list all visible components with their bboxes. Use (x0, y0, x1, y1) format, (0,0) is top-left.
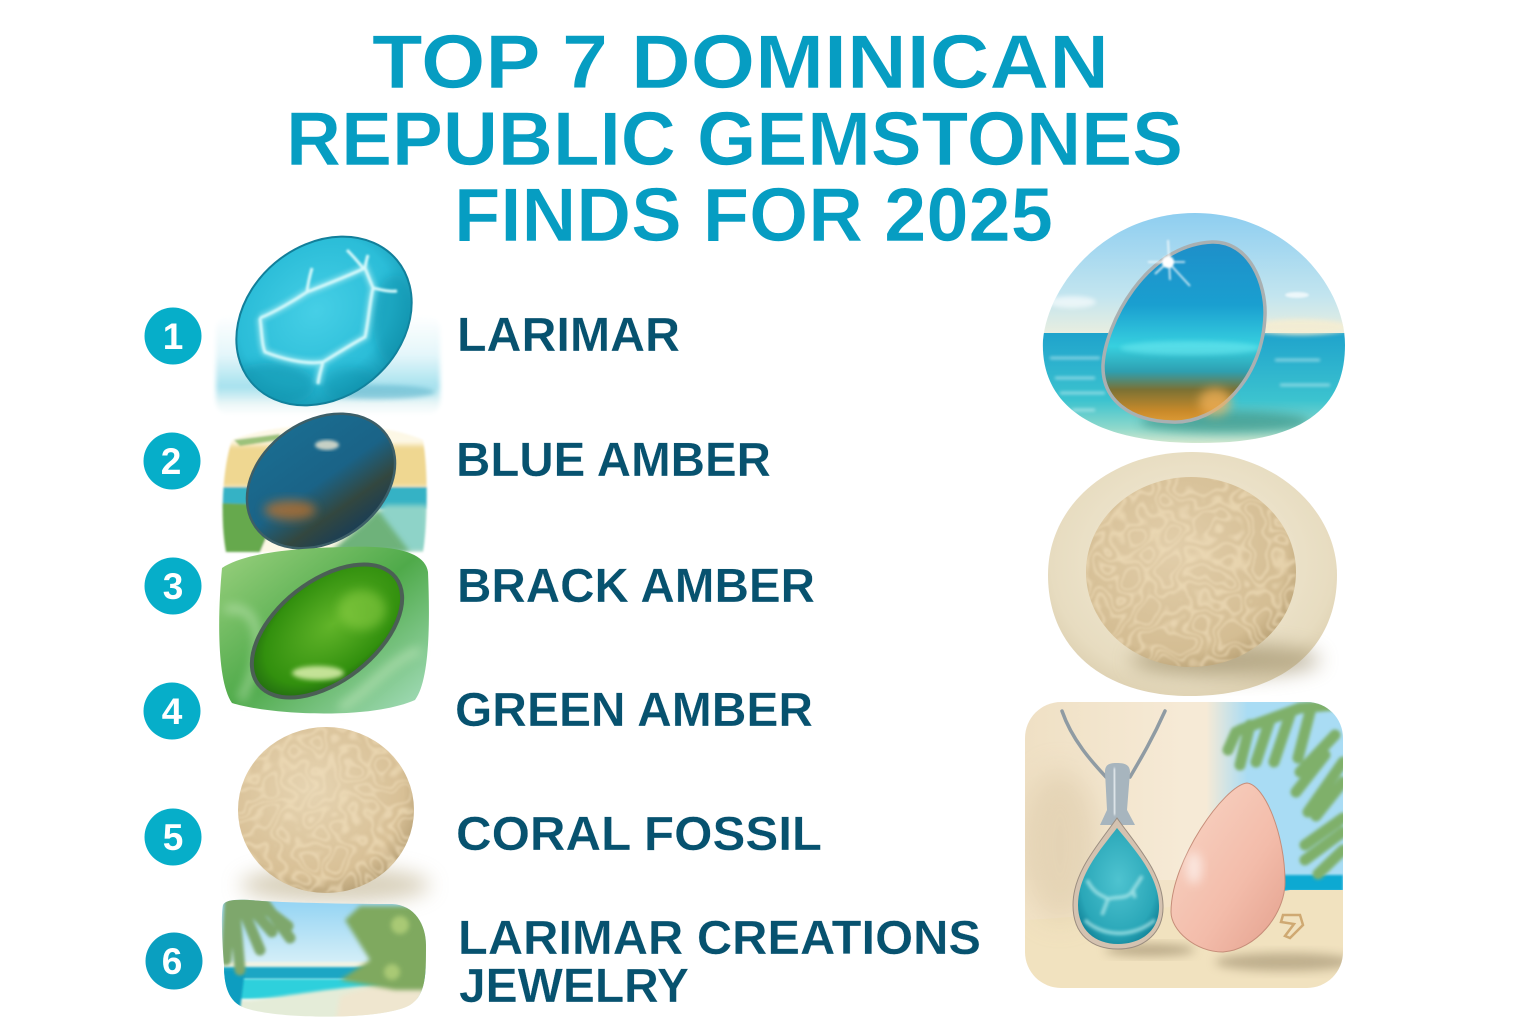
blue amber illustration (221, 412, 428, 554)
illustration: amber egg on the sea (1040, 210, 1350, 445)
title (286, 20, 1183, 258)
label: blue amber: BLUE AMBER (456, 434, 771, 487)
larimar pendant (1062, 711, 1165, 949)
badge 2 (144, 432, 200, 490)
title: FINDS FOR 2025 (454, 173, 1053, 258)
label: larimar creations jewelry: LARIMAR CREATIONS (458, 912, 981, 965)
larimar illustration (213, 236, 443, 410)
illustration: larimar pendant and pink stone (1022, 702, 1355, 988)
label: brack amber: BRACK AMBER (457, 560, 815, 613)
badge 4 (144, 682, 200, 740)
label: coral fossil: CORAL FOSSIL (456, 808, 822, 861)
badge 5: 5 (163, 817, 183, 858)
badge 4: 4 (162, 691, 183, 732)
gem labels (455, 309, 981, 1013)
green amber illustration (219, 538, 429, 724)
label: larimar creations jewelry (458, 912, 981, 1013)
title: REPUBLIC GEMSTONES (286, 97, 1183, 182)
badge 3: 3 (163, 566, 183, 607)
list column: gem illustrations (213, 236, 443, 1017)
badge 1: 1 (163, 316, 183, 357)
coral fossil illustration (238, 727, 430, 903)
beach illustration (222, 900, 426, 1017)
pink stone (1171, 783, 1303, 952)
badge 5 (144, 808, 202, 866)
badge 6 (146, 932, 202, 990)
palm fronds (1228, 705, 1343, 874)
badge 2: 2 (161, 441, 181, 482)
badge 3 (144, 558, 202, 614)
number badges (144, 308, 202, 990)
illustration: coral fossil stone (1048, 452, 1337, 696)
title: TOP 7 DOMINICAN (372, 20, 1109, 105)
label: larimar creations jewelry: JEWELRY (459, 960, 689, 1013)
badge 6: 6 (162, 941, 182, 982)
badge 1 (144, 308, 202, 364)
label: larimar: LARIMAR (457, 309, 680, 362)
label: green amber: GREEN AMBER (455, 684, 813, 737)
